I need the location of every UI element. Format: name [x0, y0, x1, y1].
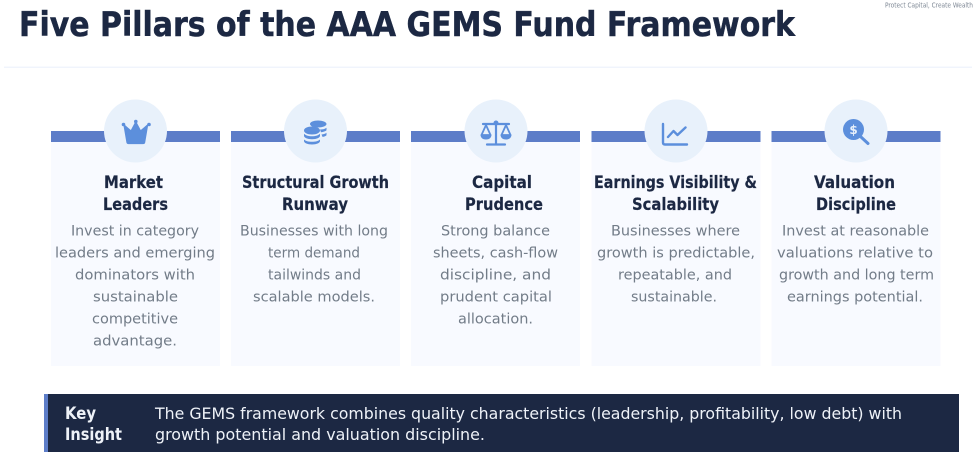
icon: crown [104, 100, 167, 162]
body text: earnings potential. [787, 288, 923, 306]
heading [594, 173, 757, 214]
body text: sustainable. [631, 288, 717, 306]
body text: growth and long term [779, 266, 934, 284]
callout text: The GEMS framework combines quality characteristics (leadership, profitability, low debt) with [154, 405, 902, 423]
callout label: Key [65, 404, 96, 423]
heading [242, 173, 389, 214]
heading: Market [104, 173, 163, 192]
body text: Invest at reasonable [782, 222, 929, 240]
body text [55, 222, 215, 350]
body text [433, 222, 558, 328]
icon: magnifier with dollar [824, 100, 888, 162]
icon: balance scale [464, 100, 528, 162]
body text: discipline, and [440, 266, 551, 284]
body text: scalable models. [253, 288, 375, 306]
callout label: Insight [65, 425, 122, 444]
icon: line chart [644, 100, 708, 162]
title: Five Pillars of the AAA GEMS Fund Framework [19, 5, 796, 44]
body text [597, 222, 755, 306]
heading: Leaders [103, 195, 168, 214]
callout text [154, 405, 902, 444]
body text: allocation. [458, 310, 533, 328]
heading: Structural Growth [242, 173, 389, 192]
body text: Invest in category [71, 222, 199, 240]
body text [777, 222, 934, 306]
heading [814, 173, 896, 214]
heading: Earnings Visibility & [594, 173, 757, 192]
body text: sheets, cash-flow [433, 244, 558, 262]
body text: repeatable, and [618, 266, 732, 284]
panel: earnings visibility and scalability [592, 100, 760, 366]
body text: valuations relative to [777, 244, 933, 262]
body text: Strong balance [441, 222, 550, 240]
body text: competitive [92, 310, 178, 328]
panel: market leaders [51, 100, 220, 366]
callout: key insight [44, 394, 959, 452]
heading: Prudence [465, 195, 543, 214]
callout text: growth potential and valuation discipline. [155, 426, 485, 444]
panel: structural growth runway [231, 100, 400, 366]
body text: growth is predictable, [597, 244, 755, 262]
panel: valuation discipline [772, 100, 940, 366]
body text [240, 222, 388, 306]
body text: Businesses where [611, 222, 740, 240]
body text: leaders and emerging [55, 244, 215, 262]
icon: magnifier with dollar: $ [849, 123, 858, 137]
callout label [65, 404, 122, 444]
body text: sustainable [93, 288, 178, 306]
heading: Discipline [816, 195, 896, 214]
icon: coins [284, 100, 347, 162]
body text: Businesses with long [240, 222, 388, 240]
heading: Runway [282, 195, 348, 214]
panel: capital prudence [411, 100, 580, 366]
heading: Capital [472, 173, 532, 192]
heading: Scalability [632, 195, 719, 214]
body text: tailwinds and [268, 266, 361, 284]
heading [465, 173, 543, 214]
heading: Valuation [814, 173, 895, 192]
body text: term demand [268, 244, 360, 262]
body text: prudent capital [440, 288, 552, 306]
heading [103, 173, 168, 214]
body text: advantage. [93, 332, 177, 350]
body text: dominators with [75, 266, 195, 284]
